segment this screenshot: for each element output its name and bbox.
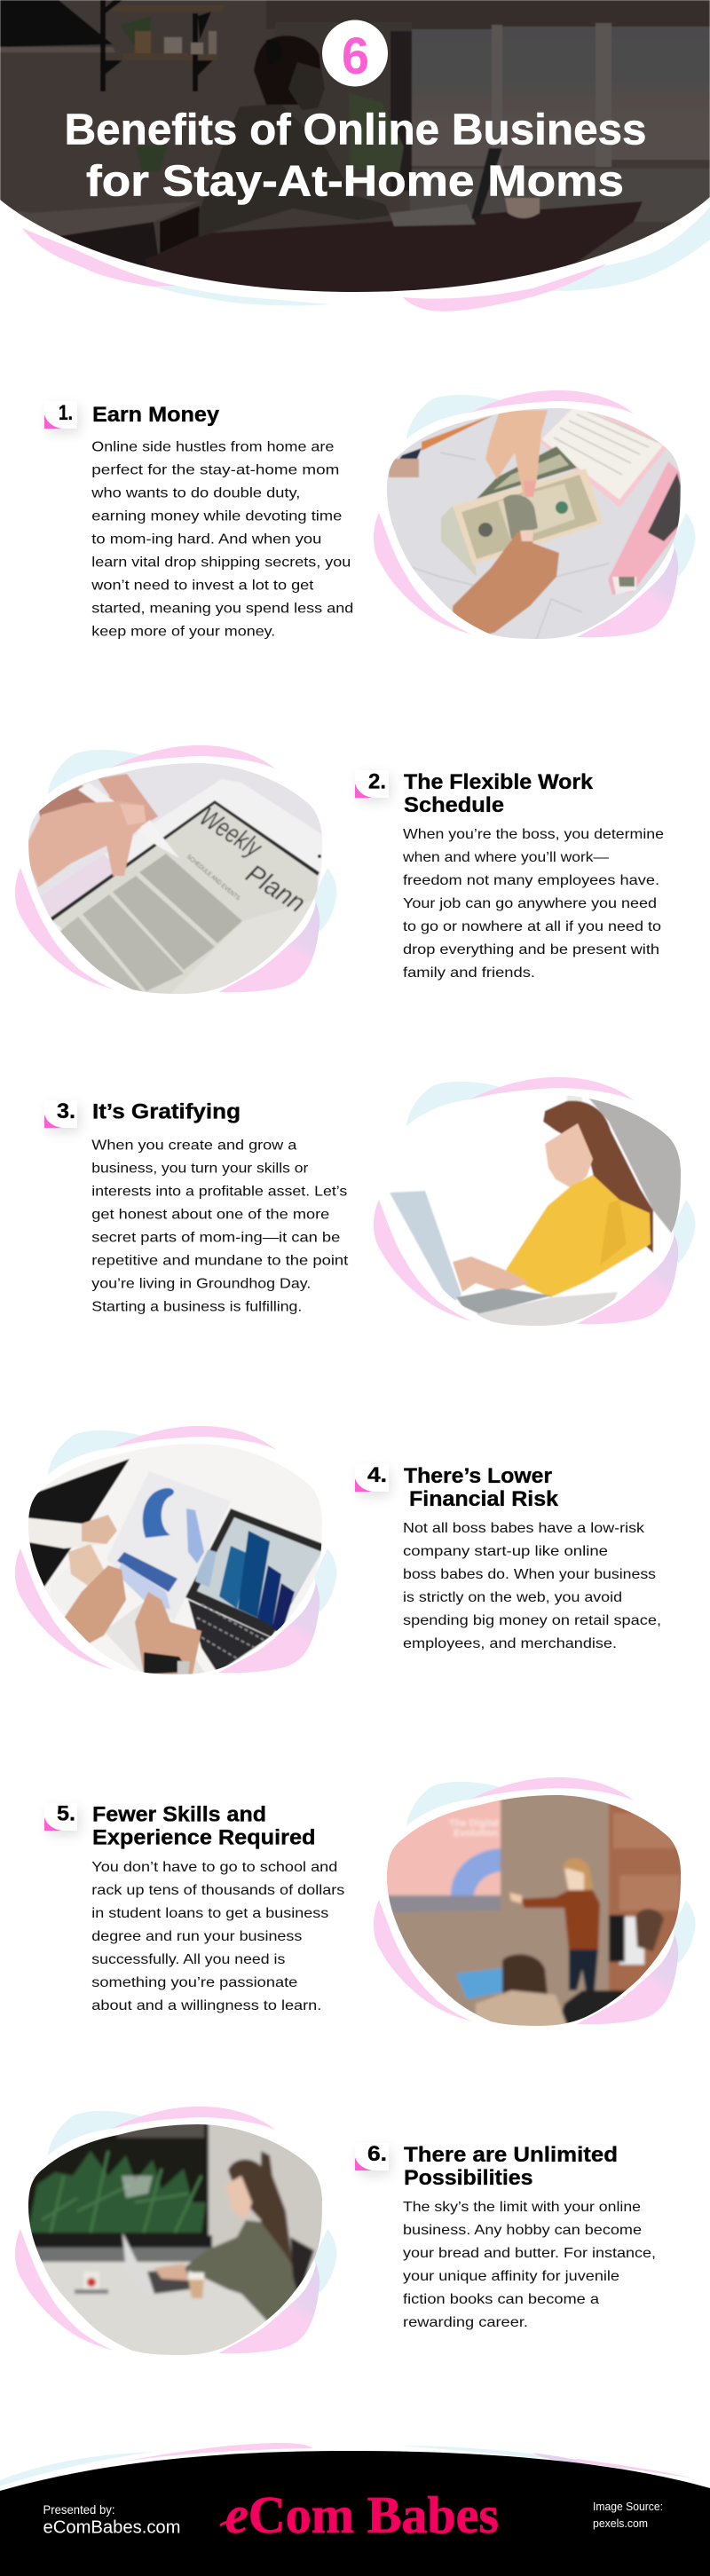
- body text: boss babes do. When your business: [403, 1567, 656, 1582]
- heading: Financial Risk: [409, 1487, 559, 1511]
- body text: earning money while devoting time: [91, 508, 342, 524]
- footer: [0, 2443, 710, 2576]
- body text: your unique affinity for juvenile: [403, 2269, 619, 2284]
- image source: [593, 2500, 663, 2530]
- body text: to go or nowhere at all if you need to: [403, 919, 661, 934]
- body text: family and friends.: [403, 965, 535, 981]
- body text: company start-up like online: [403, 1544, 608, 1559]
- body text: keep more of your money.: [91, 624, 275, 639]
- number badge 3: 3.: [57, 1099, 75, 1123]
- body text: Starting a business is fulfilling.: [91, 1299, 302, 1314]
- body text: [403, 2200, 656, 2330]
- number badge 2: [355, 769, 390, 801]
- body text: business, you turn your skills or: [91, 1161, 309, 1176]
- title: [64, 106, 646, 206]
- presented by: Presented by:: [43, 2502, 115, 2517]
- body text: [91, 1860, 344, 2013]
- body text: repetitive and mundane to the point: [91, 1253, 349, 1268]
- number badge 2: 2.: [368, 769, 386, 793]
- image source: pexels.com: [593, 2517, 648, 2530]
- body text: interests into a profitable asset. Let’s: [91, 1184, 347, 1199]
- body text: when and where you’ll work—: [402, 850, 609, 865]
- body text: [403, 1521, 661, 1651]
- body text: When you create and grow a: [91, 1138, 296, 1153]
- body text: is strictly on the web, you avoid: [403, 1590, 622, 1605]
- header photo: woman working at a laptop in a kitchen: [0, 0, 710, 302]
- body text: When you’re the boss, you determine: [403, 827, 664, 842]
- image source: Image Source:: [593, 2500, 663, 2513]
- number badge 4: [355, 1463, 390, 1496]
- body text: you’re living in Groundhog Day.: [91, 1276, 311, 1291]
- heading: It’s Gratifying: [92, 1100, 241, 1124]
- number badge: white circle with 6: [322, 20, 388, 87]
- title: Benefits of Online Business: [64, 106, 646, 154]
- body text: business. Any hobby can become: [403, 2223, 642, 2238]
- number badge 5: [44, 1802, 80, 1835]
- body text: fiction books can become a: [403, 2292, 599, 2307]
- heading: Possibilities: [404, 2166, 532, 2190]
- heading: Experience Required: [92, 1826, 316, 1850]
- heading: The Flexible Work: [404, 770, 594, 794]
- body text: drop everything and be present with: [403, 942, 659, 957]
- footer black band: [0, 2451, 710, 2576]
- body text: started, meaning you spend less and: [91, 601, 353, 616]
- number badge 5: 5.: [57, 1802, 75, 1826]
- photo blob: cash handed between two hands: [374, 390, 696, 648]
- photo blob: smiling woman in yellow sweater at laptop: [374, 1077, 696, 1335]
- heading: Earn Money: [92, 403, 220, 427]
- header decorative swooshes: [22, 207, 710, 311]
- body text: successfully. All you need is: [91, 1952, 285, 1967]
- presented by: eComBabes.com: [43, 2518, 181, 2538]
- heading: Fewer Skills and: [92, 1803, 266, 1827]
- footer decorative swooshes: [0, 2443, 693, 2486]
- header: photo banner: [0, 0, 710, 311]
- body text: freedom not many employees have.: [403, 873, 659, 888]
- photo blob: hands holding charts over a laptop: [15, 1426, 337, 1683]
- body text: [402, 827, 664, 981]
- body text: who wants to do double duty,: [91, 485, 300, 500]
- logo: eCom Babes: [225, 2485, 499, 2544]
- body text: employees, and merchandise.: [403, 1636, 617, 1651]
- panel: benefit 4: [15, 1426, 661, 1683]
- body text: in student loans to get a business: [91, 1906, 328, 1921]
- panel: benefit 5: [44, 1777, 696, 2035]
- photo blob: presenter in front of a slide: Evolution: [454, 1828, 498, 1839]
- body text: You don’t have to go to school and: [91, 1860, 337, 1875]
- photo blob: tablet with weekly planner: [15, 745, 337, 1003]
- body text: perfect for the stay-at-home mom: [91, 462, 339, 477]
- number badge 4: 4.: [367, 1463, 387, 1487]
- number badge 6: 6.: [367, 2142, 387, 2166]
- panel: benefit 1: [44, 390, 696, 648]
- number badge 6: [355, 2142, 390, 2175]
- body text: something you’re passionate: [91, 1975, 297, 1990]
- body text: degree and run your business: [91, 1929, 302, 1944]
- body text: rewarding career.: [403, 2315, 528, 2330]
- number badge 1: [44, 401, 80, 433]
- photo blob: tablet with weekly planner: SCHEDULE AND EVENTS: [185, 854, 241, 902]
- number badge 3: [44, 1099, 80, 1132]
- photo blob: presenter in front of a slide: The Digital: [449, 1818, 499, 1829]
- body text: secret parts of mom-ing—it can be: [91, 1230, 340, 1245]
- body text: rack up tens of thousands of dollars: [91, 1883, 344, 1898]
- panel: benefit 2: [15, 745, 664, 1003]
- photo blob: tablet with weekly planner: Plann: [241, 859, 311, 918]
- number badge 1: 1.: [59, 401, 73, 425]
- body text: [91, 439, 353, 639]
- body text: about and a willingness to learn.: [91, 1998, 321, 2013]
- photo blob: woman on laptop beside plants: [15, 2107, 337, 2364]
- body text: learn vital drop shipping secrets, you: [91, 555, 351, 570]
- body text: get honest about one of the more: [91, 1207, 329, 1222]
- panel: benefit 3: [44, 1077, 696, 1335]
- body text: spending big money on retail space,: [403, 1613, 661, 1628]
- presented by: [43, 2502, 181, 2538]
- body text: Your job can go anywhere you need: [403, 896, 657, 911]
- heading: [92, 1803, 316, 1850]
- body text: to mom-ing hard. And when you: [91, 532, 321, 547]
- title: for Stay-At-Home Moms: [86, 158, 624, 206]
- heading: [404, 2143, 618, 2190]
- heading: There are Unlimited: [404, 2143, 618, 2167]
- heading: Schedule: [404, 793, 504, 817]
- body text: your bread and butter. For instance,: [403, 2246, 656, 2261]
- heading: [404, 770, 594, 817]
- body text: The sky’s the limit with your online: [403, 2200, 641, 2215]
- heading: There’s Lower: [404, 1464, 552, 1488]
- panel: benefit 6: [15, 2107, 656, 2364]
- body text: [91, 1138, 349, 1314]
- number badge: white circle with 6: 6: [342, 28, 369, 85]
- body text: Not all boss babes have a low-risk: [403, 1521, 645, 1536]
- body text: won’t need to invest a lot to get: [91, 578, 314, 593]
- photo blob: presenter in front of a slide: [374, 1777, 696, 2035]
- photo blob: tablet with weekly planner: Weekly: [194, 802, 267, 864]
- body text: Online side hustles from home are: [91, 439, 334, 454]
- heading: [404, 1464, 559, 1511]
